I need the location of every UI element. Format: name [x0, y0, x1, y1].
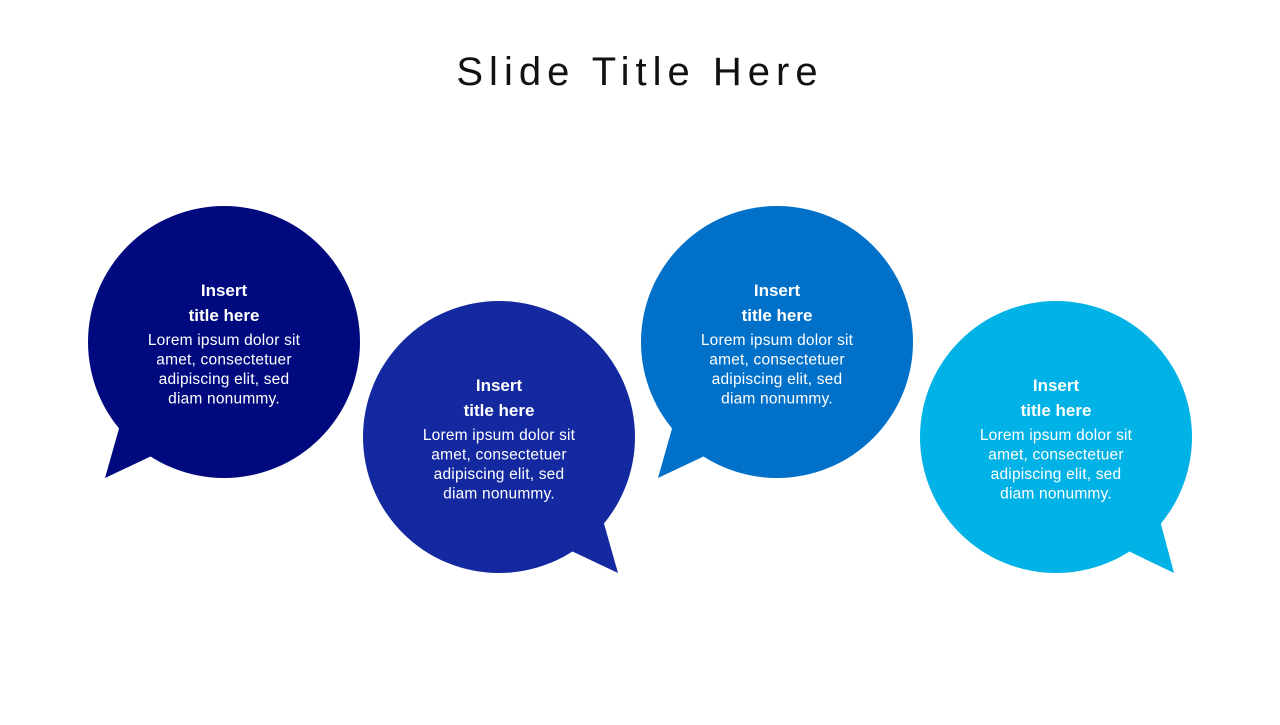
text: bubble 4	[980, 376, 1133, 502]
text: bubble 2: Insert	[476, 376, 522, 395]
text: bubble 1: adipiscing elit, sed	[159, 371, 289, 388]
text: bubble 1: Lorem ipsum dolor sit	[148, 332, 301, 349]
text: bubble 2: title here	[464, 401, 534, 420]
text: bubble 1: amet, consectetuer	[156, 352, 292, 368]
text: bubble 2: amet, consectetuer	[431, 446, 567, 464]
text: bubble 2	[423, 376, 576, 502]
bubble 4	[920, 301, 1192, 573]
text: bubble 3: Insert	[754, 281, 800, 300]
text: bubble 3: title here	[742, 306, 812, 325]
title: Slide Title Here	[456, 50, 824, 94]
text: bubble 2: adipiscing elit, sed	[434, 466, 564, 483]
text: bubble 4: title here	[1021, 401, 1091, 420]
text: bubble 4: Insert	[1033, 376, 1079, 395]
text: bubble 4: diam nonummy.	[1000, 486, 1112, 502]
text: bubble 1	[148, 281, 301, 408]
text: bubble 3: amet, consectetuer	[709, 352, 845, 368]
text: bubble 2: Lorem ipsum dolor sit	[423, 427, 576, 444]
text: bubble 4: amet, consectetuer	[988, 446, 1124, 464]
text: bubble 4: adipiscing elit, sed	[991, 466, 1121, 483]
bubble 3	[641, 206, 913, 478]
text: bubble 2: diam nonummy.	[443, 486, 555, 502]
text: bubble 3: adipiscing elit, sed	[712, 371, 842, 388]
text: bubble 1: diam nonummy.	[168, 390, 280, 408]
text: bubble 3: Lorem ipsum dolor sit	[701, 332, 854, 349]
text: bubble 3: diam nonummy.	[721, 390, 833, 408]
bubble 1	[88, 206, 360, 478]
bubble 2	[363, 301, 635, 573]
text: bubble 1: Insert	[201, 281, 247, 300]
text: bubble 1: title here	[189, 306, 259, 325]
text: bubble 4: Lorem ipsum dolor sit	[980, 427, 1133, 444]
text: bubble 3	[701, 281, 854, 408]
